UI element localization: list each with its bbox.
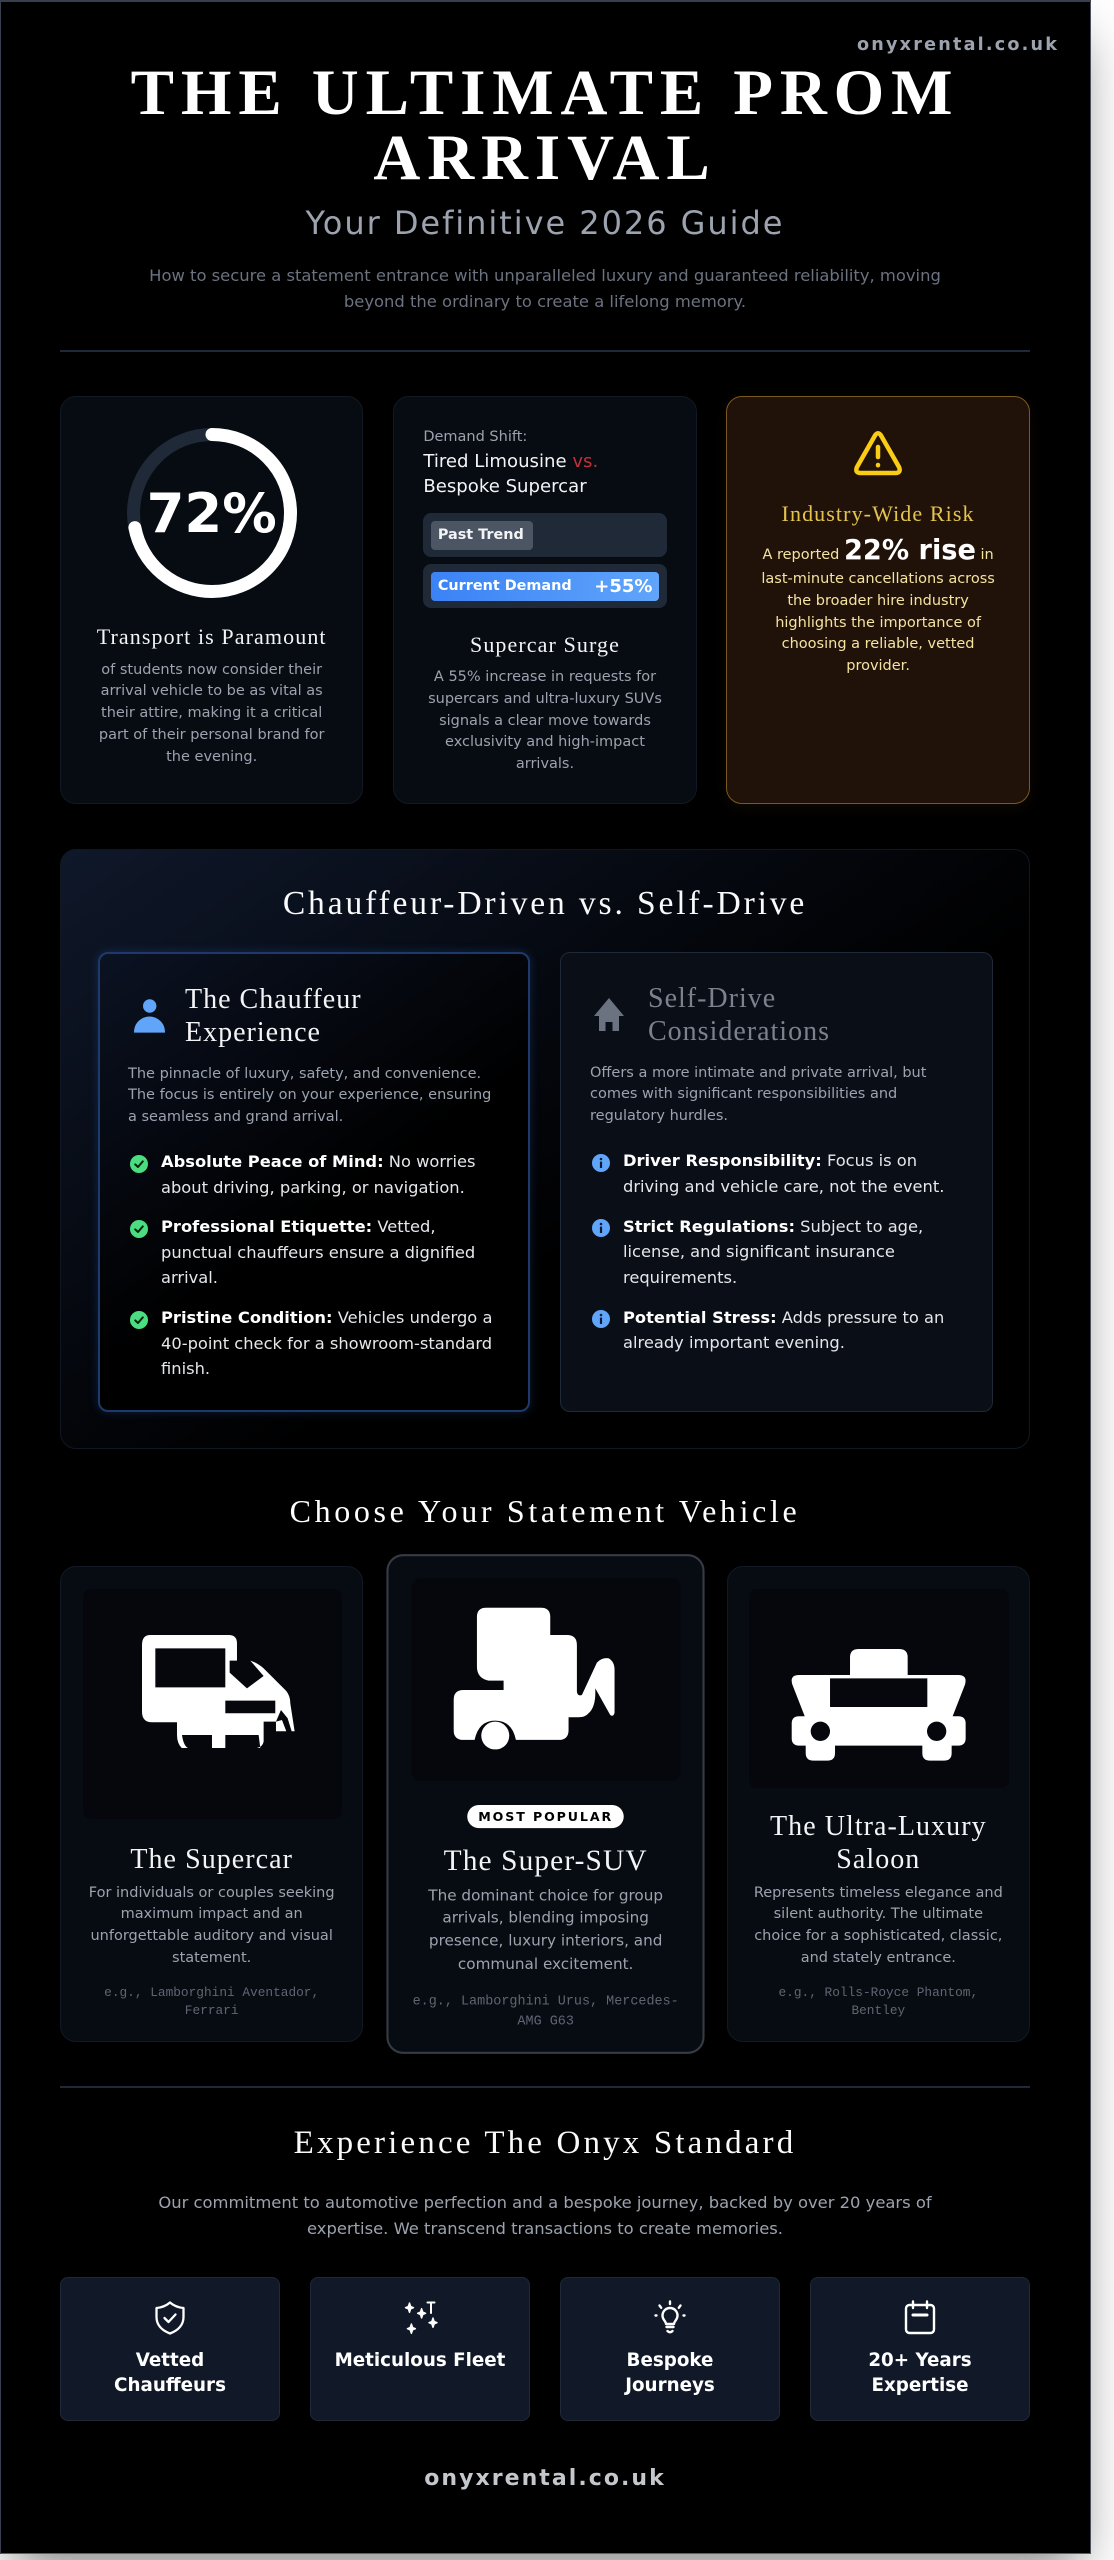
consideration: regulations (623, 1216, 923, 1287)
card: self-drive considerations (560, 952, 993, 1412)
self-drive intro: regulatory hurdles. (590, 1108, 728, 1124)
vehicle name: Saloon (836, 1844, 920, 1875)
panel: industry-wide risk (726, 396, 1030, 804)
consideration: stress (623, 1308, 944, 1352)
chauffeur intro: The pinnacle of luxury, safety, and convenience. (128, 1066, 481, 1082)
demand label: Demand Shift: (423, 429, 527, 445)
consideration: responsibility: Driver Responsibility: Focus is on (623, 1151, 917, 1170)
icon: super-suv (454, 1608, 615, 1750)
benefit: peace of mind: Absolute Peace of Mind: No worries (161, 1152, 476, 1171)
most popular badge: MOST POPULAR (478, 1809, 613, 1824)
consideration: responsibility (623, 1151, 944, 1196)
risk heading: Industry-Wide Risk (782, 501, 975, 526)
tile label (561, 2348, 779, 2399)
stat description: part of their personal brand for (99, 727, 324, 743)
icon: shield check (155, 2301, 185, 2335)
self-drive intro: comes with significant responsibilities and (590, 1086, 897, 1102)
vehicle description: statement. (172, 1950, 251, 1966)
site url tag: onyxrental.co.uk (857, 35, 1059, 55)
demand description: supercars and ultra-luxury SUVs (428, 691, 662, 707)
risk description (761, 571, 995, 674)
icon: calendar (902, 2300, 938, 2336)
self-drive heading: Considerations (648, 1016, 830, 1046)
tile label: Meticulous Fleet (335, 2350, 505, 2371)
comparison heading: Chauffeur-Driven vs. Self-Drive (283, 885, 807, 922)
icon: check (130, 1311, 148, 1329)
benefit: condition: Pristine Condition: Vehicles undergo a (161, 1308, 492, 1327)
vehicle description: choice for a sophisticated, classic, (754, 1928, 1002, 1944)
vehicle examples (104, 1985, 319, 2018)
stat heading: Transport is Paramount (97, 624, 327, 649)
icon: house (594, 998, 624, 1031)
benefit: etiquette: Professional Etiquette: Vetted, (161, 1217, 436, 1236)
stat description: arrival vehicle to be as vital as (101, 683, 323, 699)
onyx standard description (158, 2193, 932, 2238)
self-drive heading: Self-Drive (648, 982, 776, 1014)
tile: 20+ years expertise (810, 2277, 1030, 2421)
vehicle description: The dominant choice for group (428, 1888, 663, 1905)
risk description: choosing a reliable, vetted (782, 636, 975, 652)
benefit: etiquette: punctual chauffeurs ensure a dignified (161, 1243, 475, 1262)
vehicle card: ultra-luxury saloon (727, 1566, 1030, 2042)
chauffeur intro (128, 1066, 491, 1125)
demand description: arrivals. (516, 756, 574, 772)
chauffeur intro: The focus is entirely on your experience, ensuring (128, 1087, 491, 1103)
demand description: signals a clear move towards (439, 713, 651, 729)
vehicle description: unforgettable auditory and visual (90, 1928, 333, 1944)
tile label (811, 2348, 1029, 2399)
panel: demand shift (393, 396, 697, 804)
demand description: exclusivity and high-impact (445, 734, 645, 750)
vehicles heading: Choose Your Statement Vehicle (290, 1493, 800, 1529)
benefit: etiquette (161, 1217, 475, 1287)
benefit: condition (161, 1308, 492, 1378)
consideration: stress: Potential Stress: Adds pressure to an (623, 1308, 944, 1326)
demand headline: Tired Limousine vs. (423, 450, 598, 472)
vehicle name: The Super-SUV (443, 1846, 647, 1878)
bar: current demand (423, 564, 667, 608)
icon: info (592, 1219, 610, 1237)
consideration: stress: already important evening. (623, 1333, 845, 1352)
tile label: Chauffeurs (114, 2375, 226, 2396)
onyx standard description: expertise. We transcend transactions to create memories. (307, 2219, 783, 2238)
demand headline: Bespoke Supercar (423, 476, 587, 497)
icon: info (592, 1154, 610, 1172)
benefit: peace of mind (161, 1152, 476, 1197)
title (131, 57, 959, 194)
most popular badge (467, 1805, 624, 1829)
panel: 72% stat (60, 396, 363, 804)
vehicle description: and stately entrance. (801, 1950, 956, 1966)
title: THE ULTIMATE PROM (131, 57, 959, 129)
vehicle description (428, 1888, 663, 1974)
demand description: A 55% increase in requests for (434, 669, 656, 685)
icon: person (134, 999, 165, 1033)
header (60, 35, 1059, 352)
benefit: condition: 40-point check for a showroom-standard (161, 1334, 492, 1353)
benefit: condition: finish. (161, 1359, 210, 1378)
vehicle examples: AMG G63 (517, 2013, 574, 2029)
image box (749, 1589, 1009, 1788)
onyx standard description: Our commitment to automotive perfection and a bespoke journey, backed by over 20 years of (158, 2193, 932, 2212)
risk description: the broader hire industry (787, 593, 969, 609)
demand heading: Supercar Surge (470, 632, 620, 657)
chauffeur heading (185, 984, 362, 1048)
vehicle name: The Supercar (130, 1844, 293, 1875)
icon: saloon (792, 1649, 966, 1761)
intro text: beyond the ordinary to create a lifelong memory. (344, 292, 746, 311)
vehicle examples (412, 1994, 679, 2029)
vehicle examples: e.g., Rolls-Royce Phantom, (778, 1985, 978, 2000)
tile: meticulous fleet (310, 2277, 530, 2421)
onyx standard heading: Experience The Onyx Standard (294, 2125, 796, 2161)
demand headline (423, 450, 598, 497)
tile: vetted chauffeurs (60, 2277, 280, 2421)
consideration: regulations: Strict Regulations: Subject to age, (623, 1216, 923, 1236)
stat number: 72% (147, 482, 277, 545)
consideration: regulations: license, and significant insurance (623, 1242, 895, 1261)
risk description: last-minute cancellations across (761, 571, 995, 587)
consideration: regulations: requirements. (623, 1268, 737, 1287)
chauffeur heading: The Chauffeur (185, 984, 362, 1014)
stat description: the evening. (166, 749, 257, 765)
vehicle examples: e.g., Lamborghini Aventador, (104, 1985, 319, 2000)
tile label: Bespoke (627, 2350, 713, 2371)
card: the chauffeur experience (98, 952, 530, 1412)
benefit: etiquette: arrival. (161, 1268, 218, 1287)
subtitle: Your Definitive 2026 Guide (306, 204, 784, 242)
vehicle description: communal excitement. (458, 1957, 633, 1974)
vehicle description: silent authority. The ultimate (774, 1906, 983, 1922)
icon: supercar (142, 1635, 295, 1748)
vehicle examples (778, 1985, 978, 2018)
tile label (61, 2348, 279, 2399)
icon: info (592, 1310, 610, 1328)
demand description (428, 669, 662, 772)
vehicle name (770, 1811, 987, 1875)
intro text: How to secure a statement entrance with unparalleled luxury and guaranteed reliability, moving (149, 266, 941, 285)
self-drive intro (590, 1065, 926, 1124)
image box (83, 1589, 342, 1819)
vehicle examples: Bentley (851, 2003, 905, 2018)
current demand fill: Current Demand (438, 578, 572, 594)
panel: chauffeur vs self-drive (60, 849, 1030, 1449)
tile label: 20+ Years (868, 2350, 972, 2371)
title: ARRIVAL (373, 122, 717, 194)
current demand fill (431, 572, 659, 601)
current demand fill: +55% (594, 576, 652, 597)
vehicle card: super-suv (featured) (386, 1554, 705, 2054)
consideration: responsibility: driving and vehicle care, not the event. (623, 1177, 944, 1196)
vehicle description: maximum impact and an (121, 1906, 303, 1922)
vehicle description: Represents timeless elegance and (754, 1885, 1003, 1901)
risk description: highlights the importance of (775, 615, 981, 631)
bar: past trend (423, 513, 667, 557)
ring chart 72% (127, 428, 297, 598)
intro text (149, 266, 941, 311)
icon: check (130, 1155, 148, 1173)
icon: light bulb (652, 2300, 688, 2336)
vehicle card: supercar (60, 1566, 363, 2042)
past trend fill (431, 521, 533, 550)
icon: warning triangle (854, 431, 902, 476)
chauffeur heading: Experience (185, 1016, 321, 1048)
icon: check (130, 1220, 148, 1238)
risk description: provider. (846, 658, 910, 674)
vehicle description: arrivals, blending imposing (442, 1911, 649, 1928)
chauffeur intro: a seamless and grand arrival. (128, 1109, 343, 1125)
risk stat line: A reported 22% rise in (762, 535, 994, 566)
vehicle description (89, 1885, 335, 1966)
stat description: their attire, making it a critical (101, 705, 322, 721)
stat description (99, 662, 324, 765)
vehicle description (754, 1885, 1003, 1966)
tile: bespoke journeys (560, 2277, 780, 2421)
self-drive heading (648, 982, 830, 1046)
tile label: Vetted (136, 2350, 204, 2371)
footer url: onyxrental.co.uk (424, 2466, 666, 2491)
tile label: Journeys (625, 2375, 715, 2396)
vehicle examples: e.g., Lamborghini Urus, Mercedes- (412, 1994, 679, 2009)
image box (411, 1579, 680, 1782)
vehicle name: The Ultra-Luxury (770, 1811, 987, 1842)
self-drive intro: Offers a more intimate and private arrival, but (590, 1065, 926, 1081)
vehicle description: presence, luxury interiors, and (429, 1934, 662, 1951)
benefit: peace of mind: about driving, parking, or navigation. (161, 1178, 465, 1197)
past trend fill: Past Trend (438, 527, 524, 543)
tile label: Expertise (871, 2375, 969, 2396)
stat description: of students now consider their (101, 662, 322, 678)
vehicle description: For individuals or couples seeking (89, 1885, 335, 1901)
vehicle examples: Ferrari (185, 2003, 239, 2018)
icon: sparkles (402, 2300, 438, 2336)
